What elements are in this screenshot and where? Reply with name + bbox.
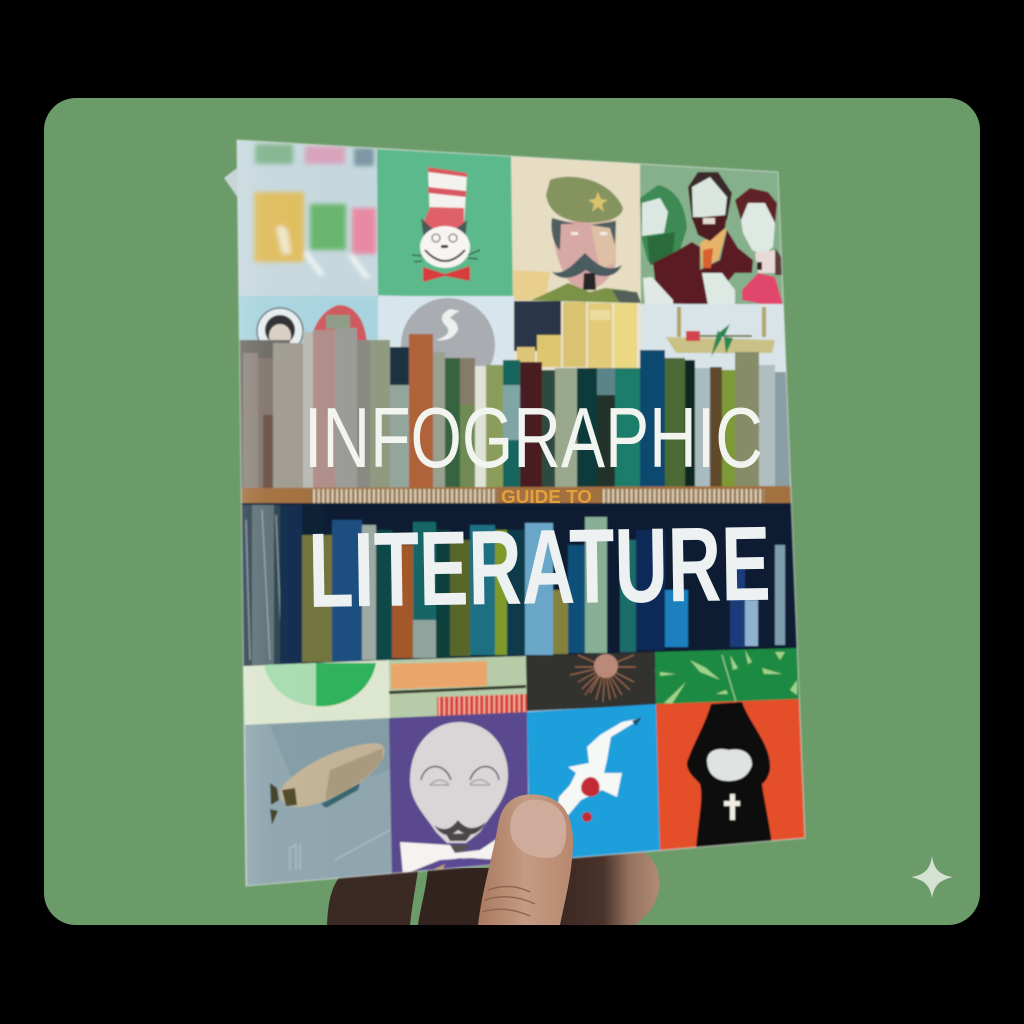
thumb	[478, 794, 573, 925]
maroon jacket	[653, 230, 753, 305]
panel: green circle tile	[243, 660, 390, 726]
panel: seagull tile	[527, 704, 660, 862]
panel: skull mask tile	[389, 712, 529, 878]
lower faces and hat	[643, 273, 784, 308]
panel: hooded monk tile	[656, 699, 806, 852]
panel: second row tiles	[239, 294, 786, 372]
knuckle wrinkles	[482, 886, 535, 916]
left finger	[327, 870, 418, 925]
background card	[44, 98, 980, 925]
right figure	[735, 188, 782, 275]
shelf strip	[238, 486, 792, 505]
shrink wrap glare	[240, 194, 302, 884]
shirt and tie	[700, 228, 727, 268]
hand holding book	[327, 850, 659, 925]
book cover	[224, 140, 806, 886]
wrap corner	[224, 168, 238, 198]
title: LITERATURE: LITERATURE	[308, 505, 771, 630]
panel: leaves tile	[655, 648, 801, 705]
right fingers	[558, 850, 659, 925]
icon: zeppelin	[270, 743, 384, 825]
panel: cat in the hat	[377, 149, 513, 300]
icon: coffin with rose	[666, 307, 775, 357]
panel: bookshelf window	[237, 140, 378, 300]
panel: orange bar tile	[389, 656, 527, 718]
center bearded man	[688, 172, 732, 220]
title: INFOGRAPHIC: INFOGRAPHIC	[304, 391, 763, 486]
panel: military officer portrait	[511, 156, 641, 306]
chart: lower shelf of book spines	[238, 503, 798, 668]
panel: sun tile	[526, 652, 656, 711]
subtitle: GUIDE TO: GUIDE TO	[501, 486, 592, 507]
middle finger	[418, 868, 489, 925]
icon: red arch	[311, 305, 367, 345]
beard	[692, 215, 727, 241]
thumbnail	[510, 800, 566, 858]
book edge	[237, 140, 805, 886]
icon: stacked gold books	[517, 302, 637, 368]
photo scene	[44, 98, 980, 925]
chart: upper shelf of book spines	[238, 328, 790, 490]
left bearded man	[640, 185, 687, 265]
icon: sparkle watermark	[911, 856, 953, 898]
panel: zeppelin tile	[245, 718, 392, 886]
icon: portrait medallion	[256, 306, 304, 344]
panel: group portrait	[640, 163, 784, 308]
